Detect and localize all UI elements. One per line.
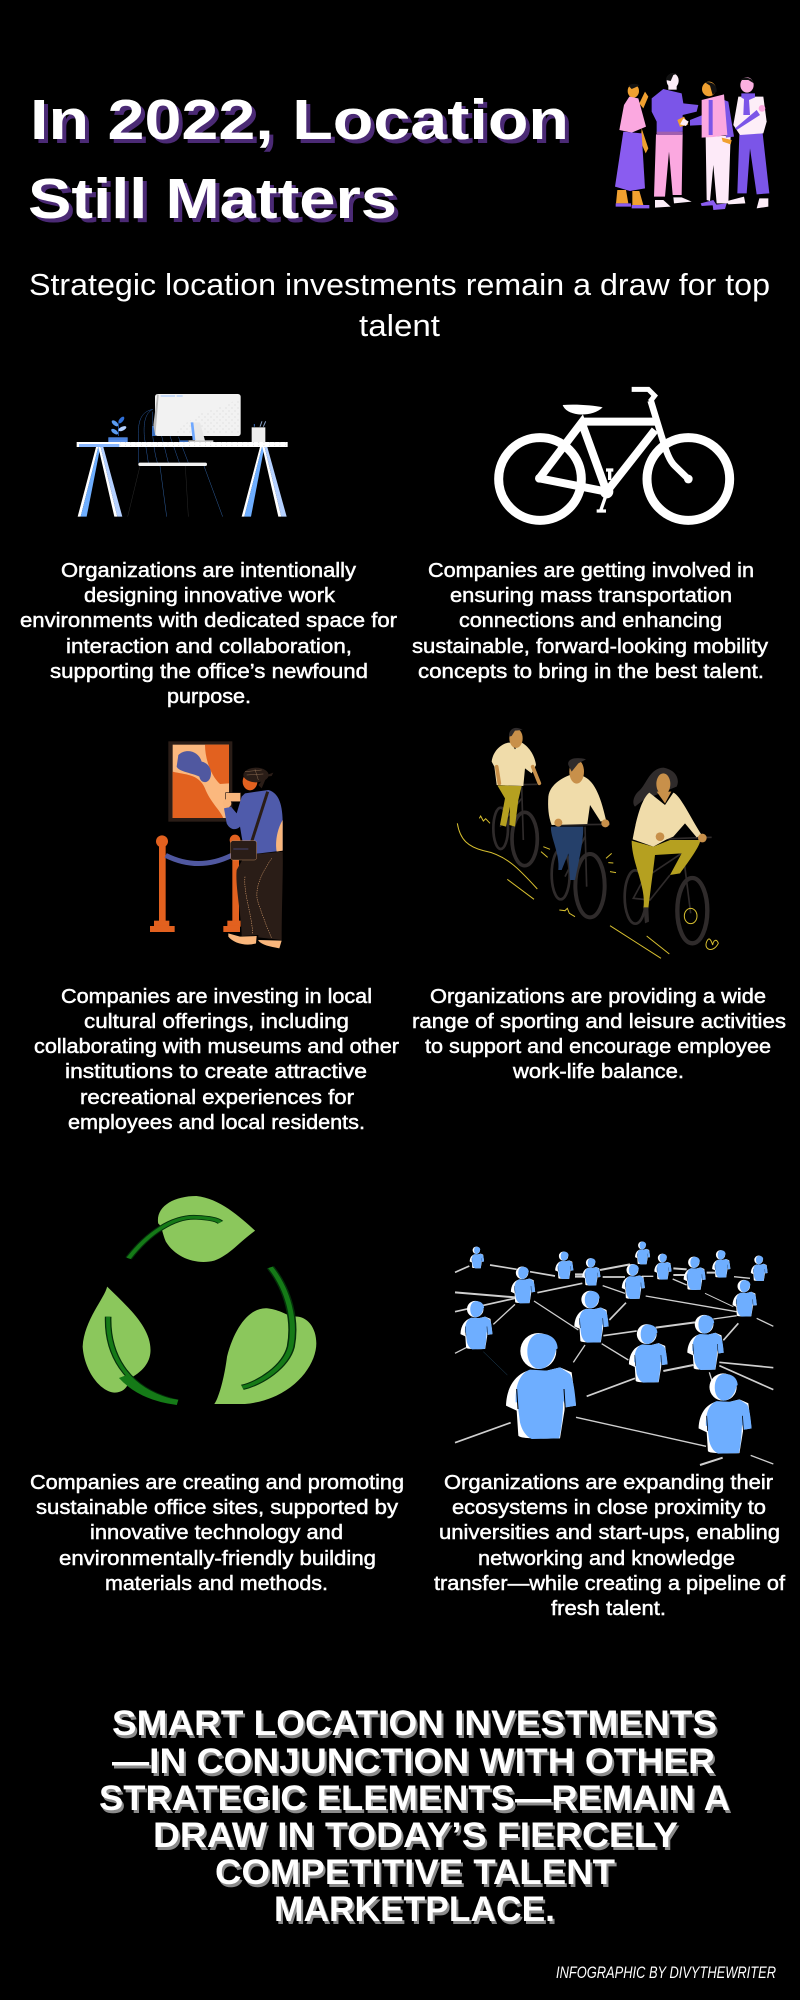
icon: recycling leaves xyxy=(83,1196,316,1404)
text block: cultural offerings: cultural offerings, including xyxy=(84,1011,349,1033)
text block: mobility xyxy=(412,560,768,683)
text block: work environments: purpose. xyxy=(167,686,251,708)
text block: expanding ecosystems xyxy=(434,1472,785,1620)
text block: cultural offerings: collaborating with museums and other xyxy=(34,1036,399,1058)
text block: sporting and leisure: to support and encourage employee xyxy=(425,1036,771,1058)
text block: mobility: concepts to bring in the best talent. xyxy=(418,661,764,683)
text block: expanding ecosystems: networking and knowledge xyxy=(478,1548,735,1570)
subtitle xyxy=(29,267,770,343)
text block: expanding ecosystems: ecosystems in close proximity to xyxy=(452,1497,766,1519)
conclusion callout: MARKETPLACE. xyxy=(274,1890,555,1929)
text block: cultural offerings: institutions to create attractive xyxy=(65,1061,367,1083)
icon: desk with computer xyxy=(77,394,288,517)
conclusion callout xyxy=(99,1704,730,1929)
text block: sustainable office sites: sustainable office sites, supported by xyxy=(36,1497,398,1519)
text block: work environments: designing innovative work xyxy=(84,585,336,607)
icon: person viewing painting in museum xyxy=(150,741,283,948)
title: In 2022, Location xyxy=(30,88,569,152)
conclusion callout: DRAW IN TODAY’S FIERCELY xyxy=(153,1816,678,1855)
subtitle: Strategic location investments remain a draw for top xyxy=(29,267,770,302)
text block: sustainable office sites: innovative technology and xyxy=(90,1522,343,1544)
title: Still Matters xyxy=(28,167,397,231)
conclusion callout: SMART LOCATION INVESTMENTS xyxy=(112,1704,717,1743)
text block: work environments xyxy=(20,560,397,708)
text block: work environments: interaction and collaboration, xyxy=(66,636,352,658)
icon: three cyclists xyxy=(457,728,718,958)
conclusion callout: STRATEGIC ELEMENTS—REMAIN A xyxy=(99,1779,730,1818)
text block: mobility: ensuring mass transportation xyxy=(450,585,732,607)
text block: sustainable office sites: materials and methods. xyxy=(105,1573,328,1595)
text block: work environments: supporting the office’s newfound xyxy=(50,661,368,683)
icon: connected people network xyxy=(455,1242,773,1465)
text block: sporting and leisure: range of sporting and leisure activities xyxy=(412,1011,786,1033)
text block: sporting and leisure: work-life balance. xyxy=(512,1061,684,1083)
text block: cultural offerings xyxy=(34,986,399,1134)
text block: mobility: Companies are getting involved in xyxy=(428,560,754,582)
text block: expanding ecosystems: universities and start-ups, enabling xyxy=(439,1522,780,1544)
text block: mobility: connections and enhancing xyxy=(459,610,722,632)
icon: group of four people talking xyxy=(615,73,769,210)
conclusion callout: COMPETITIVE TALENT xyxy=(215,1853,615,1892)
text block: expanding ecosystems: Organizations are expanding their xyxy=(444,1472,773,1494)
text block: sporting and leisure xyxy=(412,986,786,1083)
text block: sustainable office sites: Companies are creating and promoting xyxy=(30,1472,404,1494)
text block: expanding ecosystems: fresh talent. xyxy=(551,1598,666,1620)
text block: cultural offerings: Companies are investing in local xyxy=(61,986,372,1008)
text block: work environments: Organizations are intentionally xyxy=(61,560,356,582)
text block: cultural offerings: recreational experiences for xyxy=(80,1087,354,1109)
text block: expanding ecosystems: transfer—while creating a pipeline of xyxy=(434,1573,785,1595)
text block: work environments: environments with dedicated space for xyxy=(20,610,397,632)
text block: cultural offerings: employees and local residents. xyxy=(68,1112,365,1134)
conclusion callout: —IN CONJUNCTION WITH OTHER xyxy=(112,1742,715,1781)
subtitle: talent xyxy=(359,308,440,343)
title xyxy=(28,88,569,231)
icon: bicycle xyxy=(499,389,730,520)
text block: sporting and leisure: Organizations are providing a wide xyxy=(430,986,766,1008)
text block: sustainable office sites xyxy=(30,1472,404,1595)
text block: mobility: sustainable, forward-looking mobility xyxy=(412,636,768,658)
text block: sustainable office sites: environmentally-friendly building xyxy=(59,1548,376,1570)
